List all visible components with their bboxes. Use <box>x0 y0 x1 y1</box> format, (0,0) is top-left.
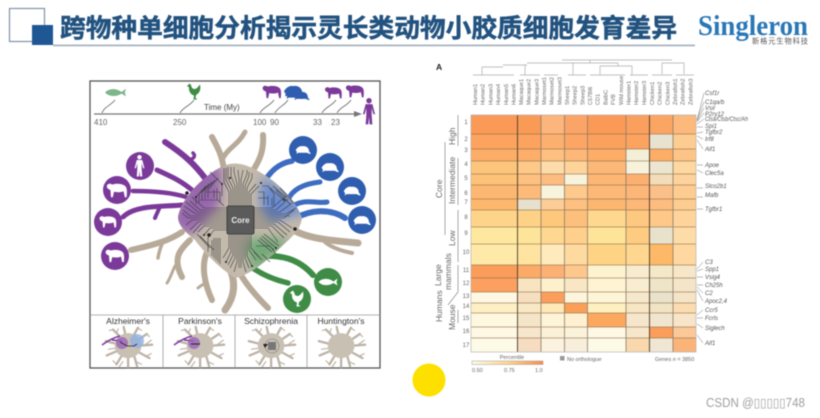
gene labels: Spp1 <box>705 267 719 273</box>
panel label A: A <box>436 62 442 72</box>
column sample labels: Macaque3 <box>534 79 540 105</box>
row numbers: 5 <box>464 176 468 182</box>
column sample labels: Zebrafish1 <box>673 79 679 105</box>
column sample labels: Macaque1 <box>519 79 525 105</box>
gene count: Genes n = 3850 <box>655 357 694 363</box>
category labels: High <box>447 127 457 145</box>
disease: Huntington's: Huntington's <box>318 316 364 326</box>
panel: microglia evolution figure <box>90 81 380 368</box>
gene labels: Csf1r <box>705 91 720 97</box>
column sample labels: Sheep2 <box>573 86 579 105</box>
core chip: Core <box>231 216 250 225</box>
row numbers: 4 <box>464 162 468 168</box>
disease: Parkinson's: Parkinson's <box>178 316 222 326</box>
column sample labels: Wild mouse <box>619 76 625 105</box>
gene labels: Vsir <box>705 106 716 112</box>
gene labels: Aif1 <box>704 147 715 153</box>
timeline axis <box>94 100 362 127</box>
header icon: nested squares <box>10 8 53 45</box>
category labels: Core <box>434 179 444 198</box>
percentile colour legend: 0.50 <box>472 368 483 374</box>
column sample labels <box>473 76 694 105</box>
logo: Singleron: 新格元生物科技 <box>752 36 808 46</box>
disease: Schizophrenia: Schizophrenia <box>244 316 298 326</box>
percentile colour legend: Percentile <box>500 355 524 361</box>
microglia cell with circuit core <box>123 132 358 310</box>
gene labels: Tgfbr1 <box>705 207 722 213</box>
gene labels: Apoc2,4 <box>704 299 728 305</box>
core chip <box>227 206 254 234</box>
timeline axis: 23 <box>331 118 340 127</box>
column sample labels: Marmoset3 <box>557 77 563 105</box>
column sample labels: Marmoset1 <box>542 77 548 105</box>
watermark: CSDN @▯▯▯▯▯748 <box>706 396 805 410</box>
column sample labels: Human2 <box>481 84 487 105</box>
gene labels: Fcrls <box>705 316 718 322</box>
timeline icon: marmoset <box>325 87 342 98</box>
gene labels: Ccr5 <box>705 308 718 314</box>
gene labels: Irf8 <box>705 137 714 143</box>
column sample labels: FVB <box>611 94 617 105</box>
row numbers <box>463 120 470 349</box>
disease: Alzheimer's: Alzheimer's <box>106 316 150 326</box>
disease panels <box>90 315 380 368</box>
heatmap <box>471 115 696 352</box>
gene leader lines <box>697 93 704 343</box>
column sample labels: Human5 <box>504 84 510 105</box>
species circles: rodents <box>289 136 376 234</box>
heatmap column separators <box>518 115 650 352</box>
disease: Parkinson's <box>174 316 224 367</box>
row numbers: 15 <box>463 316 470 322</box>
column sample labels: Human6 <box>512 84 518 105</box>
row numbers: 1 <box>464 120 468 126</box>
column sample labels: Chicken2 <box>658 82 664 105</box>
timeline axis: 90 <box>270 118 279 127</box>
percentile colour legend: 0.75 <box>504 368 515 374</box>
column sample labels: Macaque2 <box>527 79 533 105</box>
no orthologue legend: No orthologue <box>567 357 602 363</box>
timeline icon: human <box>363 98 375 124</box>
timeline axis: 100 <box>253 118 267 127</box>
timeline axis: Time (My) <box>204 103 240 112</box>
row numbers: 14 <box>463 304 470 310</box>
gene labels: Siglech <box>705 326 725 332</box>
column sample labels: CD1 <box>596 94 602 105</box>
gene labels: Apoe <box>704 163 720 169</box>
gene labels <box>704 91 749 347</box>
row numbers: 7 <box>464 200 468 206</box>
dendrogram <box>473 60 694 75</box>
timeline axis: 250 <box>173 118 187 127</box>
column sample labels: C57Bl6 <box>588 87 594 105</box>
gene labels: Aif1 <box>704 341 715 347</box>
timeline icon: fish <box>105 89 126 96</box>
row numbers: 16 <box>463 329 470 335</box>
category labels: Large <box>433 264 443 286</box>
row numbers: 2 <box>464 137 468 143</box>
species circles: fish and chicken <box>283 268 342 313</box>
column sample labels: Sheep3 <box>580 86 586 105</box>
column sample labels: Zebrafish2 <box>681 79 687 105</box>
column sample labels: Zebrafish3 <box>688 79 694 105</box>
circuit traces <box>182 167 296 272</box>
timeline axis: 33 <box>313 118 322 127</box>
gene labels: Ctsa/Ctsb/Ctsc/Ah <box>705 117 749 123</box>
row numbers: 9 <box>464 231 468 237</box>
logo: Singleron: Singleron <box>698 10 808 42</box>
tinted regions of the cell body <box>178 166 302 272</box>
row numbers: 17 <box>463 343 470 349</box>
row numbers: 6 <box>464 191 468 197</box>
column sample labels: Human3 <box>488 84 494 105</box>
column sample labels: Chicken3 <box>665 82 671 105</box>
percentile colour legend: 1.0 <box>535 368 543 374</box>
category labels: Humans <box>434 290 444 322</box>
gene labels: Ch25h <box>705 283 723 289</box>
gene labels: Spi1 <box>705 124 717 130</box>
percentile colour legend <box>472 355 543 374</box>
gene labels: C2 <box>705 291 713 297</box>
species circles: primates and sheep <box>94 152 154 270</box>
column sample labels: Hamster2 <box>634 81 640 105</box>
column sample labels: Hamster3 <box>642 81 648 105</box>
category labels: Low <box>447 230 457 246</box>
cell body <box>178 163 302 278</box>
gene labels: Mafb <box>705 193 719 199</box>
column sample labels: BalbC <box>603 90 609 105</box>
title underline <box>53 44 695 46</box>
row numbers: 3 <box>464 148 468 154</box>
gene labels: Slco2b1 <box>705 184 727 190</box>
column sample labels: Chicken1 <box>650 82 656 105</box>
timeline axis: 410 <box>94 118 108 127</box>
category brackets <box>445 115 458 323</box>
row numbers: 12 <box>463 281 470 287</box>
heatmap row separators <box>471 134 696 338</box>
yellow cursor highlight <box>412 364 446 396</box>
gene labels: Vsig4 <box>705 275 721 281</box>
category labels: Mouse <box>447 304 457 330</box>
category labels <box>433 127 457 330</box>
gene labels: C3 <box>705 260 713 266</box>
timeline icon: rodents <box>284 86 310 100</box>
timeline icon: chicken <box>187 84 200 100</box>
row numbers: 10 <box>463 250 470 256</box>
gene labels: C1qa/b <box>705 100 725 106</box>
coloured dendrites <box>123 142 345 283</box>
column sample labels: Human1 <box>473 84 479 105</box>
timeline icon: sheep <box>263 86 281 98</box>
disease: Alzheimer's <box>102 316 152 367</box>
gene labels: P2ry12 <box>705 112 725 118</box>
title: 跨物种单细胞分析揭示灵长类动物小胶质细胞发育差异 <box>60 14 677 43</box>
category labels: Intermediate <box>447 156 457 204</box>
timeline icon: macaque <box>346 85 364 97</box>
tan dendrites <box>131 132 358 310</box>
gene labels: Clec5a <box>705 171 724 177</box>
column sample labels: Sheep1 <box>565 86 571 105</box>
category labels: mammals <box>443 253 453 290</box>
column sample labels: Human4 <box>496 84 502 105</box>
column sample labels: Hamster1 <box>626 81 632 105</box>
disease: Huntington's <box>318 316 365 367</box>
row numbers: 11 <box>463 268 470 274</box>
gene labels: Tgfbr2 <box>705 130 723 136</box>
disease: Schizophrenia <box>244 316 298 367</box>
row numbers: 13 <box>463 294 470 300</box>
row numbers: 8 <box>464 215 468 221</box>
column sample labels: Marmoset2 <box>550 77 556 105</box>
